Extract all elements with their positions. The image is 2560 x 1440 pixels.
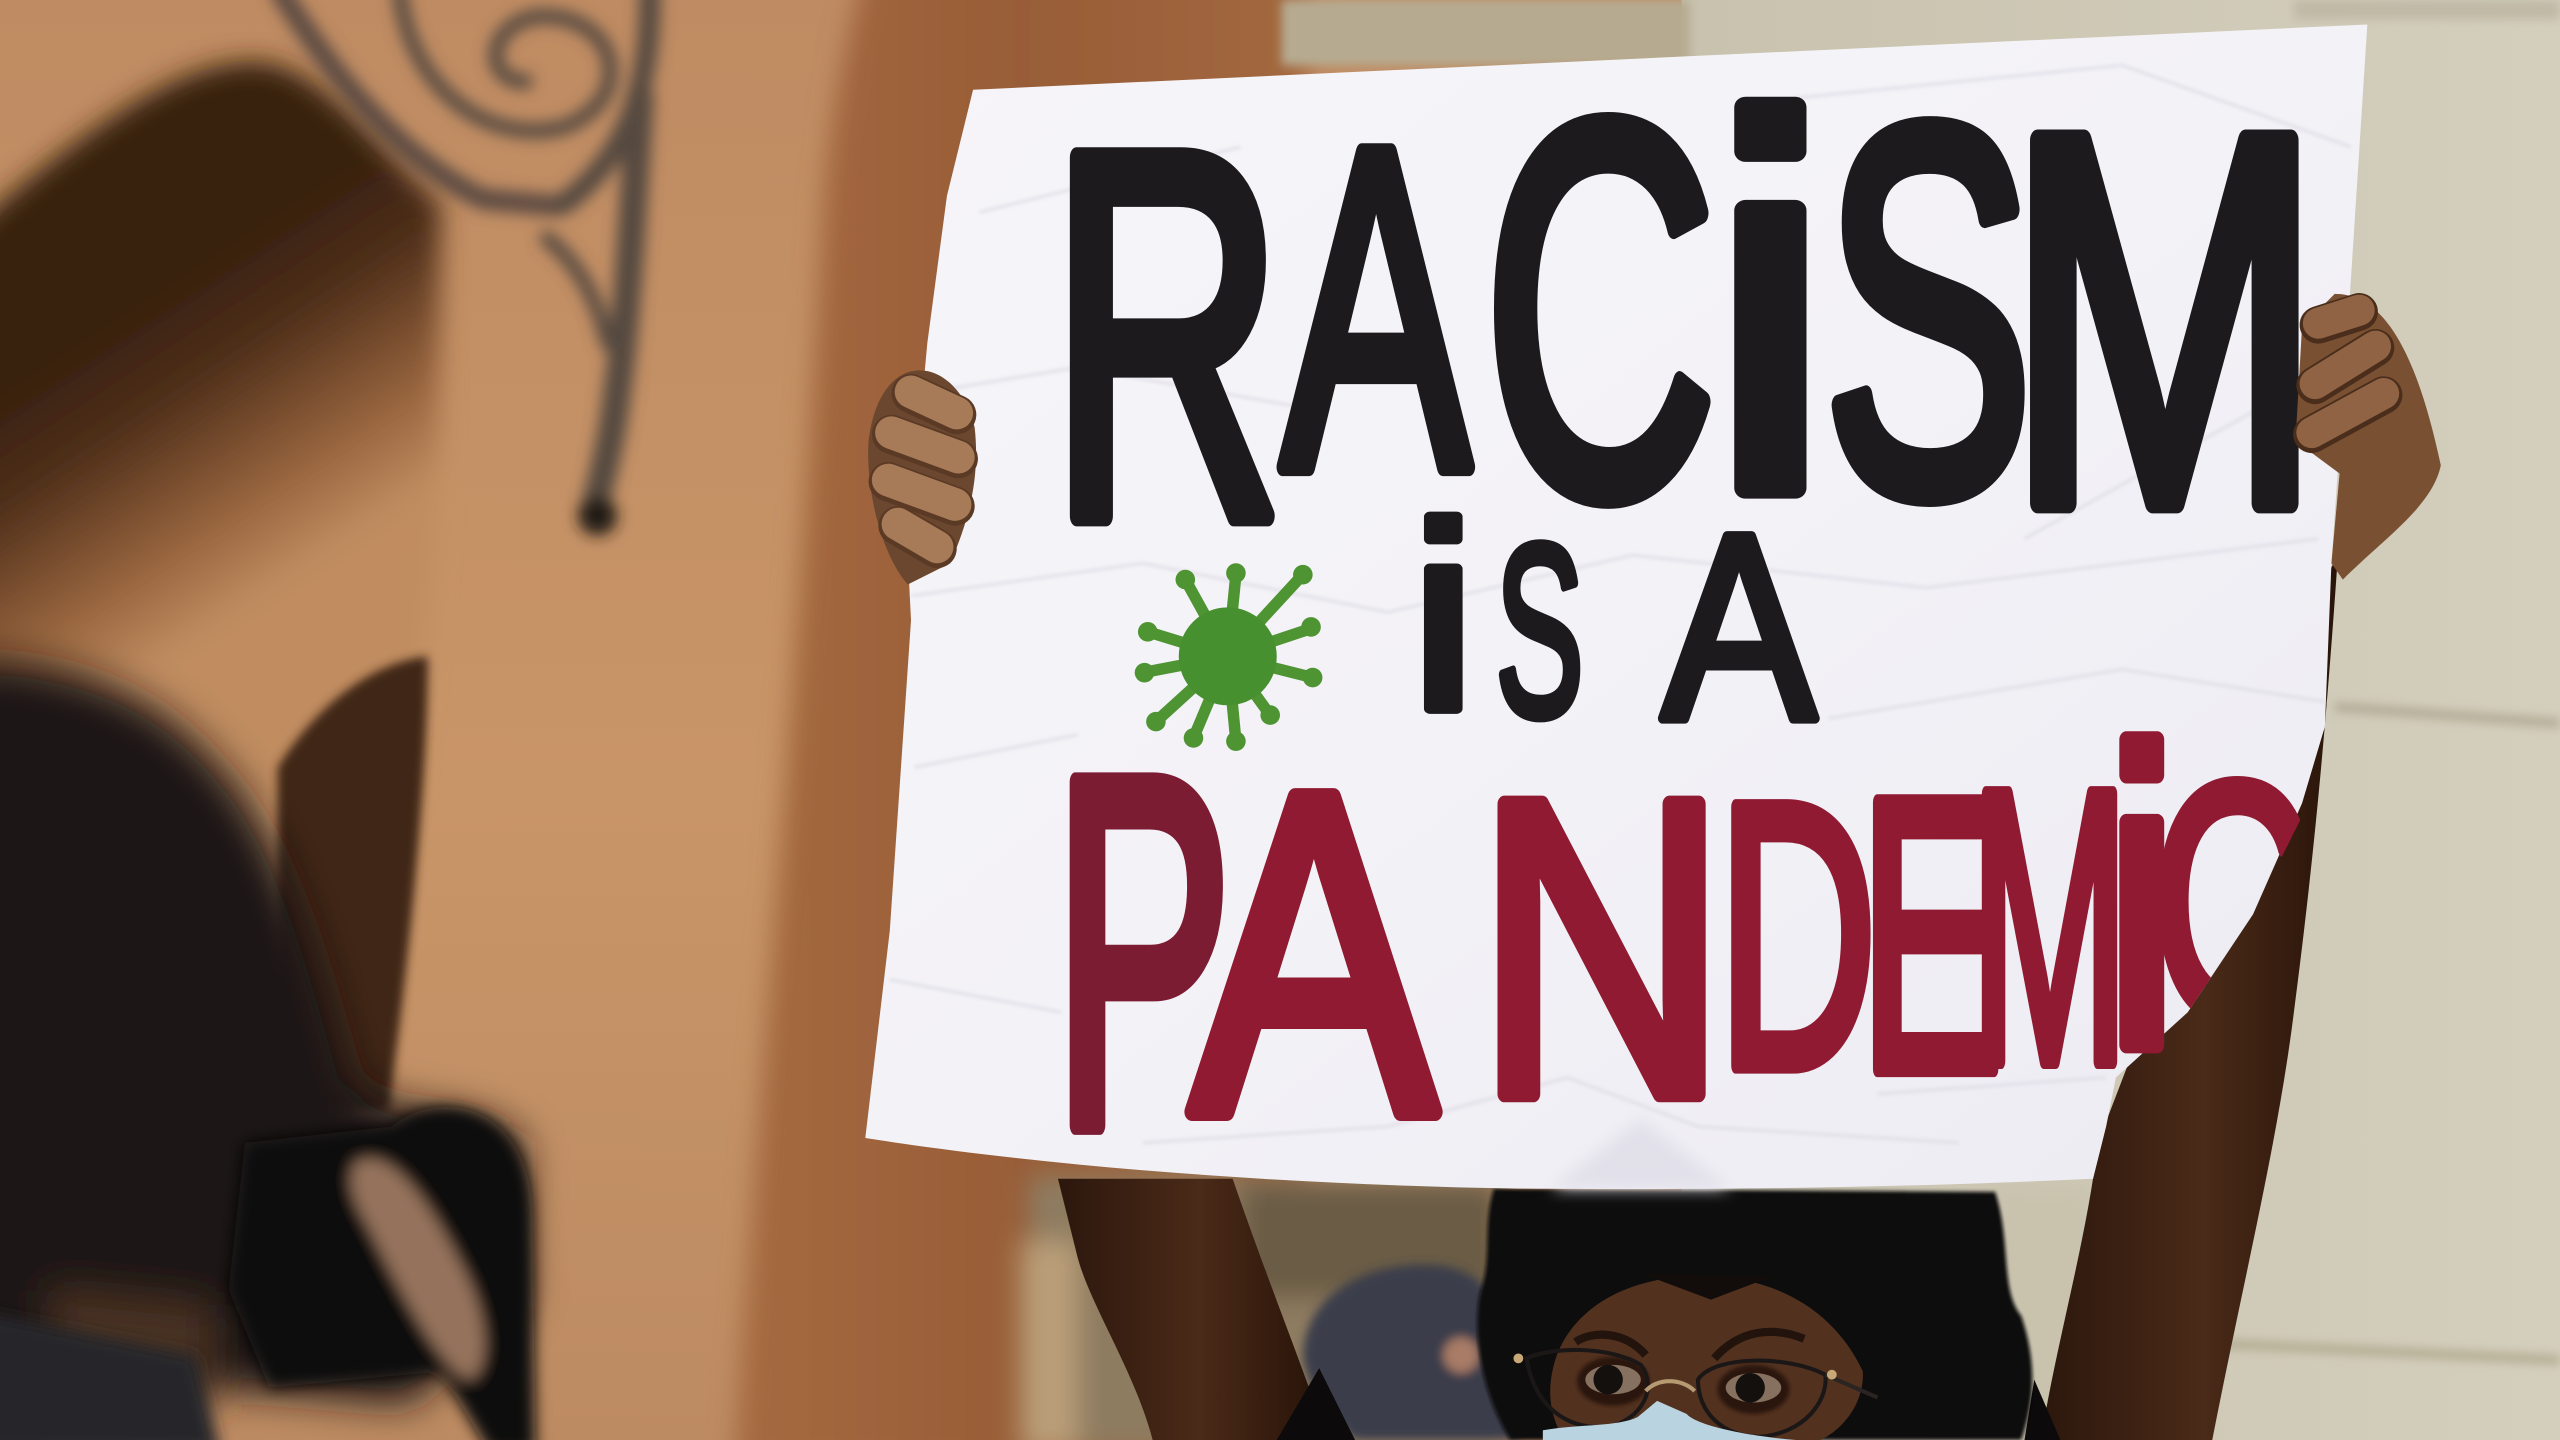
sign text: RACISM [1050, 12, 2322, 626]
sign text: PANDEMIC: E [1860, 718, 2003, 1152]
background: small dark arch [278, 656, 428, 1110]
face mask [1543, 1401, 1796, 1440]
person's left arm [1058, 1179, 1355, 1440]
photographer in the foreground, blurred [0, 661, 522, 1440]
right hand gripping the sign [2296, 294, 2441, 580]
sign text: is A: i [1410, 470, 1477, 765]
glasses [1513, 1350, 1878, 1437]
sign text: PANDEMIC: C [2152, 713, 2312, 1091]
eyebrows [1576, 1332, 1804, 1358]
sign text: RACISM: R [1050, 45, 1283, 626]
sign text: is A [1410, 470, 1816, 775]
protest sign paper [865, 24, 2367, 1189]
sign text: PANDEMIC [1070, 731, 2300, 1135]
sign text: is A: A [1662, 479, 1816, 775]
background: shaded pillar recess [735, 0, 1306, 1440]
paper creases [890, 65, 2351, 1143]
person's right arm [2024, 555, 2338, 1440]
face [1550, 1273, 1863, 1440]
eyes [1577, 1357, 1649, 1406]
background: blurred space behind the person [1020, 1176, 2098, 1440]
sign text: PANDEMIC: A [1191, 698, 1438, 1209]
sign text: PANDEMIC: D [1718, 725, 1877, 1147]
background: large dark archway [0, 62, 441, 800]
sign text: RACISM: A [1282, 53, 1471, 564]
afro hair [1477, 1189, 2032, 1440]
sign text: PANDEMIC: i [2103, 665, 2181, 1135]
bystander's cap, blurred [1303, 1265, 1520, 1440]
sign text: RACISM: i [1708, 12, 1833, 600]
sign text: RACISM: C [1484, 13, 1716, 606]
sign text: PANDEMIC: M [1970, 710, 2129, 1144]
sign text: RACISM: M [2007, 26, 2322, 615]
black sleeve [2024, 1380, 2060, 1440]
left hand gripping the sign [868, 370, 976, 584]
sign text: is A: S [1496, 494, 1584, 767]
sign text: RACISM: S [1824, 20, 2033, 603]
icon: green virus drawing [1135, 563, 1322, 751]
background: beige wall on the right [1282, 0, 2560, 1440]
camera [229, 1107, 536, 1440]
photographer's finger [351, 1159, 484, 1380]
black sleeve [1277, 1368, 1355, 1440]
wrought iron bracket [281, 0, 650, 536]
sign text: PANDEMIC: P [1053, 674, 1232, 1231]
sign text: PANDEMIC: N [1476, 712, 1727, 1183]
